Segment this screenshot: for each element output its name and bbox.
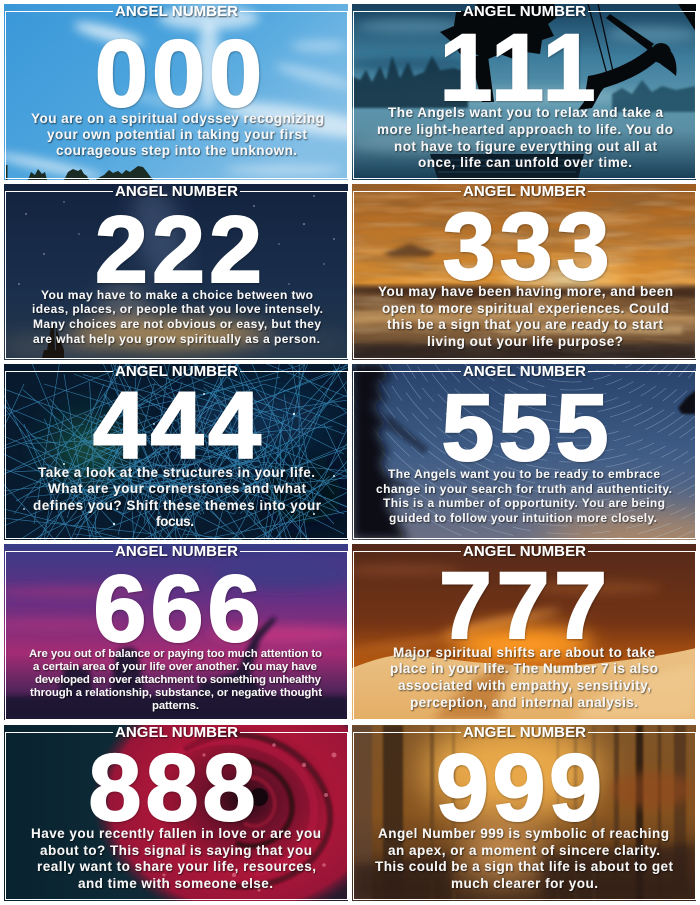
number: 000	[95, 21, 262, 127]
background: starry night and sailboat	[0, 179, 349, 360]
description: You are on a spiritual odyssey recognizing	[31, 111, 324, 126]
description: defines you? Shift these themes into your	[33, 498, 322, 513]
description: Major spiritual shifts are about to take	[393, 645, 655, 660]
description: much clearer for you.	[451, 876, 598, 891]
frame	[354, 192, 696, 358]
number: 333	[442, 194, 610, 300]
description: The Angels want you to be ready to embrace	[388, 467, 660, 481]
description: your own potential in taking your first	[47, 127, 308, 142]
description	[376, 467, 672, 525]
background: red rose with water drops	[4, 725, 348, 901]
pier	[430, 154, 584, 180]
panel: angel number 111	[342, 2, 697, 180]
description	[31, 111, 324, 158]
frame	[354, 12, 696, 178]
panel: angel number 777	[342, 543, 696, 720]
treetops silhouette	[6, 165, 153, 180]
description	[375, 826, 674, 891]
autumn foliage	[610, 772, 694, 808]
panel: angel number 555	[352, 364, 696, 540]
description	[378, 284, 673, 349]
description: associated with empathy, sensitivity,	[398, 678, 651, 693]
description: are what help you grow spiritually as a person.	[33, 332, 320, 346]
description: an apex, or a moment of sincere clarity.	[388, 843, 660, 858]
tree trunks	[352, 725, 686, 901]
background: lake with swing silhouette	[342, 2, 697, 180]
description: Many choices are not obvious or easy, but they	[33, 317, 321, 331]
panel: angel number 888	[4, 725, 348, 901]
description: perception, and internal analysis.	[410, 695, 638, 710]
description	[377, 105, 673, 170]
frame	[6, 192, 348, 358]
title: ANGEL NUMBER	[115, 363, 238, 380]
title: ANGEL NUMBER	[115, 724, 238, 741]
number: 555	[442, 375, 608, 481]
panel: angel number 333	[352, 183, 696, 360]
line network	[4, 364, 348, 540]
number: 888	[88, 735, 256, 841]
star trails	[352, 364, 696, 540]
panel: angel number 000	[4, 4, 348, 180]
frame	[354, 552, 696, 720]
right tree silhouette	[678, 390, 696, 414]
description: about to? This signal is saying that you	[40, 843, 312, 858]
description: What are your cornerstones and what	[48, 481, 306, 496]
description: guided to follow your intuition more closely.	[389, 511, 657, 525]
title: ANGEL NUMBER	[463, 724, 586, 741]
panel: angel number 999	[352, 720, 696, 901]
description: and time with someone else.	[78, 876, 273, 891]
background: star trails and dark tree	[352, 364, 696, 540]
title: ANGEL NUMBER	[463, 363, 586, 380]
description: Are you out of balance or paying too much attention to	[29, 648, 322, 660]
title: ANGEL NUMBER	[115, 183, 238, 200]
title: ANGEL NUMBER	[115, 3, 238, 20]
description: The Angels want you to relax and take a	[388, 105, 663, 120]
dunes	[352, 648, 696, 720]
panel: angel number 444	[4, 364, 348, 540]
description: place in your life. The Number 7 is also	[390, 661, 658, 676]
left tree silhouette	[352, 364, 408, 540]
description: You may have been having more, and been	[378, 284, 673, 299]
treeline	[352, 56, 468, 108]
description: not have to figure everything out all at	[394, 139, 658, 154]
frame	[354, 372, 696, 538]
number: 777	[439, 553, 607, 659]
rose	[94, 725, 348, 901]
description: a certain area of your life over another. You may have	[33, 661, 317, 673]
background: blue sky with clouds and treetops	[4, 4, 348, 180]
description: really want to share your life, resources,	[37, 859, 316, 874]
description: this be a sign that you are ready to start	[387, 317, 664, 332]
rock and figure silhouettes	[4, 616, 348, 720]
description: Have you recently fallen in love or are you	[31, 826, 321, 841]
description	[31, 826, 321, 891]
frame	[6, 372, 348, 538]
frame	[6, 552, 348, 720]
sailboat	[42, 324, 64, 358]
sky and sea texture	[352, 184, 696, 360]
background: blue network of lines	[4, 364, 348, 540]
tree crown	[440, 2, 556, 60]
swinging figure	[578, 14, 676, 110]
number: 666	[94, 556, 260, 662]
description: developed an over attachment to something unhealthy	[35, 674, 322, 686]
background: purple and magenta dusk with silhouettes	[0, 544, 359, 720]
description: through a relationship, substance, or negative thought	[30, 687, 322, 699]
title: ANGEL NUMBER	[463, 3, 586, 20]
description: patterns.	[152, 700, 199, 712]
frame	[354, 732, 696, 900]
description: focus.	[156, 514, 194, 529]
number: 222	[95, 197, 262, 303]
panel: angel number 666	[0, 543, 359, 720]
background: golden misty forest	[352, 720, 696, 901]
description: Take a look at the structures in your life.	[38, 465, 315, 480]
number: 111	[440, 15, 596, 121]
description: living out your life purpose?	[427, 334, 623, 349]
description: This could be a sign that life is about to get	[375, 859, 674, 874]
number: 444	[93, 373, 261, 479]
description: This is a number of opportunity. You are being	[383, 496, 665, 510]
sea highlights	[352, 288, 696, 360]
background: desert dunes at sunset	[342, 544, 696, 720]
description: You may have to make a choice between two	[41, 288, 313, 302]
number: 999	[436, 735, 602, 841]
description: more light-hearted approach to life. You do	[377, 122, 673, 137]
frame	[6, 732, 348, 900]
description: open to more spiritual experiences. Could	[382, 301, 669, 316]
description: ideas, places, or people that you love intensely.	[32, 302, 323, 316]
description: Angel Number 999 is symbolic of reaching	[378, 826, 669, 841]
panel: angel number 222	[0, 179, 349, 360]
background: orange sunset over sea	[352, 184, 696, 360]
description: change in your search for truth and authenticity.	[376, 482, 672, 496]
description: courageous step into the unknown.	[56, 143, 297, 158]
description	[29, 648, 322, 712]
frame	[6, 12, 348, 178]
description	[33, 465, 322, 529]
description	[390, 645, 658, 710]
title: ANGEL NUMBER	[463, 183, 586, 200]
description	[32, 288, 323, 346]
title: ANGEL NUMBER	[115, 543, 238, 560]
description: once, life can unfold over time.	[418, 155, 632, 170]
dark cloud	[382, 244, 436, 257]
title: ANGEL NUMBER	[463, 543, 586, 560]
